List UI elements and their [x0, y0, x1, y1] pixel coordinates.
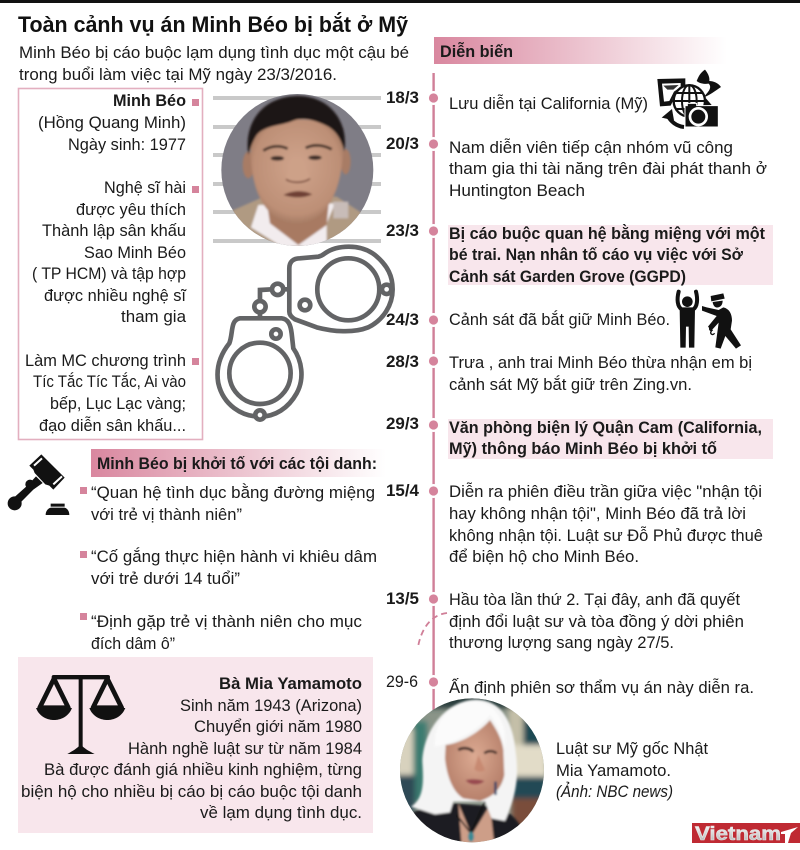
photo: Mia Yamamoto — [400, 698, 544, 842]
profile: career: Nghệ sĩ hài — [104, 179, 186, 197]
caption: Mia Yamamoto: (Ảnh: NBC news) — [556, 782, 673, 801]
profile: career — [32, 179, 199, 326]
event 20/3: tham gia thi tài năng trên đài phát thanh ở — [449, 160, 767, 178]
title: Toàn cảnh vụ án Minh Béo bị bắt ở Mỹ — [18, 12, 409, 37]
event 18/3 — [386, 89, 648, 113]
event 29-6 — [386, 673, 754, 697]
event 24/3: 24/3 — [386, 311, 419, 329]
event 23/3 highlighted: 23/3 — [386, 222, 419, 240]
profile: programmes — [25, 352, 199, 435]
event 29/3 highlighted: 29/3 — [386, 415, 419, 433]
mugshot height lines — [213, 96, 381, 243]
event 29-6: Ấn định phiên sơ thẩm vụ án này diễn ra. — [449, 678, 754, 697]
subtitle: trong buổi làm việc tại Mỹ ngày 23/3/2016. — [19, 66, 337, 84]
icon: travel photo globe camera butterfly — [657, 70, 721, 127]
Mia Yamamoto biography: Sinh năm 1943 (Arizona) — [180, 697, 362, 715]
event 15/4: Diễn ra phiên điều trần giữa việc "nhận tội — [449, 482, 762, 501]
icon: handcuffs — [218, 247, 393, 420]
Mia Yamamoto biography: Chuyển giới năm 1980 — [194, 718, 362, 736]
event 15/4: để biện hộ cho Minh Béo. — [449, 548, 639, 566]
event 15/4: hay không nhận tội", Minh Béo đã trả lời — [449, 505, 746, 523]
icon: scales of justice — [36, 675, 125, 754]
profile: name and birth: Ngày sinh: 1977 — [68, 136, 186, 154]
charge 2: với trẻ dưới 14 tuổi” — [91, 570, 240, 588]
event 20/3 — [386, 135, 767, 200]
icon: police arrest — [678, 292, 741, 349]
heading: Diễn biến: Diễn biến — [440, 42, 513, 61]
event 29/3 highlighted: Mỹ) thông báo Minh Béo bị khởi tố — [449, 440, 717, 458]
event 15/4: 15/4 — [386, 482, 420, 500]
dashed arc — [418, 613, 447, 647]
profile: programmes: Tíc Tắc Tíc Tắc, Ai vào — [33, 372, 186, 391]
profile: programmes: đạo diễn sân khấu... — [39, 416, 186, 435]
event 18/3: 18/3 — [386, 89, 419, 107]
timeline axis — [426, 73, 440, 710]
caption: Mia Yamamoto: Luật sư Mỹ gốc Nhật — [556, 740, 708, 758]
charge 1 — [80, 483, 375, 524]
caption: Mia Yamamoto: Mia Yamamoto. — [556, 762, 671, 780]
subtitle: Minh Béo bị cáo buộc lạm dụng tình dục một cậu bé — [19, 44, 409, 62]
panel: Mia Yamamoto — [18, 657, 373, 833]
event 29/3 highlighted — [386, 415, 773, 459]
caption: Mia Yamamoto — [556, 740, 708, 801]
heading: Diễn biến — [434, 37, 727, 64]
event 23/3 highlighted: Cảnh sát Garden Grove (GGPD) — [449, 268, 686, 286]
charge 2 — [80, 547, 377, 588]
subtitle — [19, 44, 409, 84]
profile: career: Thành lập sân khấu — [42, 222, 186, 240]
heading: charges — [91, 449, 386, 477]
Mia Yamamoto biography: Hành nghề luật sư từ năm 1984 — [128, 740, 362, 758]
heading: charges: Minh Béo bị khởi tố với các tội danh: — [97, 455, 377, 473]
charge 3: “Định gặp trẻ vị thành niên cho mục — [91, 613, 362, 631]
charge 1: với trẻ vị thành niên” — [91, 506, 242, 524]
event 28/3: Trưa , anh trai Minh Béo thừa nhận em bị — [449, 354, 752, 372]
top black bar — [0, 0, 800, 3]
Mia Yamamoto biography — [21, 675, 362, 822]
Mia Yamamoto biography: Bà được đánh giá nhiều kinh nghiệm, từng — [44, 761, 362, 779]
event 20/3: Nam diễn viên tiếp cận nhóm vũ công — [449, 138, 733, 157]
Mia Yamamoto biography: về lạm dụng tình dục. — [200, 804, 362, 822]
charge 3 — [80, 613, 362, 653]
event 28/3: cảnh sát Mỹ bắt giữ trên Zing.vn. — [449, 375, 692, 394]
charge 3: đích dâm ô” — [91, 635, 175, 653]
profile: name and birth: (Hồng Quang Minh) — [38, 114, 186, 132]
panel: Minh Béo profile — [18, 88, 202, 440]
event 28/3: 28/3 — [386, 353, 419, 371]
profile: career: Sao Minh Béo — [84, 244, 186, 262]
event 29-6: 29-6 — [386, 673, 418, 691]
event 28/3 — [386, 353, 752, 394]
photo: Minh Béo mugshot — [221, 94, 374, 246]
Mia Yamamoto biography: Bà Mia Yamamoto — [219, 675, 362, 693]
charge 1: “Quan hệ tình dục bằng đường miệng — [91, 483, 375, 502]
event 23/3 highlighted: Bị cáo buộc quan hệ bằng miệng với một — [449, 224, 765, 243]
profile: programmes: Làm MC chương trình — [25, 352, 186, 370]
profile: career: được yêu thích — [76, 201, 186, 219]
event 20/3: Huntington Beach — [449, 182, 585, 200]
icon: gavel — [8, 454, 69, 515]
charge 2: “Cố gắng thực hiện hành vi khiêu dâm — [91, 547, 377, 566]
event 20/3: 20/3 — [386, 135, 419, 153]
profile: career: ( TP HCM) và tập hợp — [32, 265, 186, 283]
profile: name and birth: Minh Béo — [113, 92, 186, 110]
list: charges — [80, 483, 377, 653]
event 23/3 highlighted: bé trai. Nạn nhân tố cáo vụ việc với Sở — [449, 246, 743, 264]
profile: name and birth — [38, 92, 199, 154]
event 18/3: Lưu diễn tại California (Mỹ) — [449, 94, 648, 113]
event 13/5: Hầu tòa lần thứ 2. Tại đây, anh đã quyết — [449, 591, 740, 609]
Mia Yamamoto biography: biện hộ cho nhiều bị cáo bị cáo buộc tội danh — [21, 783, 362, 801]
event 15/4 — [386, 482, 763, 566]
profile: programmes: bếp, Lục Lạc vàng; — [50, 395, 186, 413]
logo: Vietnam+ — [692, 823, 800, 845]
event 24/3: Cảnh sát đã bắt giữ Minh Béo. — [449, 310, 670, 329]
event 15/4: không nhận tội. Luật sư Đỗ Phủ được thuê — [449, 526, 763, 545]
profile: career: được nhiều nghệ sĩ — [44, 287, 187, 305]
event 13/5: 13/5 — [386, 590, 419, 608]
event 13/5 — [386, 590, 744, 652]
event 29/3 highlighted: Văn phòng biện lý Quận Cam (California, — [449, 419, 762, 437]
event 13/5: định đổi luật sư và tòa đồng ý dời phiên — [449, 613, 744, 631]
event 13/5: thương lượng sang ngày 27/5. — [449, 634, 674, 652]
event 23/3 highlighted — [386, 222, 773, 286]
logo: Vietnam+: Vietnam — [695, 824, 781, 845]
profile: career: tham gia — [121, 308, 187, 326]
